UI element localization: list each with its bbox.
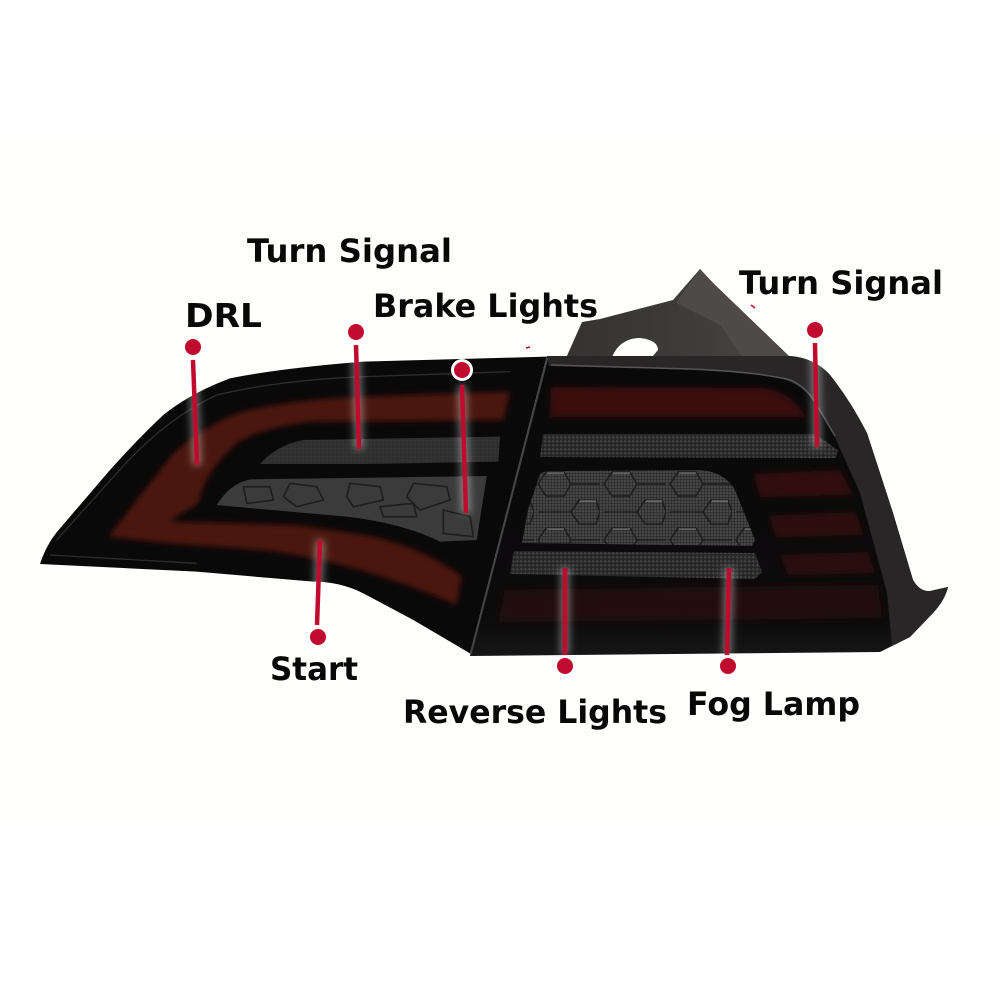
left lamp edge lines bbox=[50, 372, 510, 563]
dot: DRL bbox=[185, 339, 201, 355]
line: turn signal right bbox=[815, 343, 817, 447]
right lamp lens: lower strip bbox=[510, 551, 762, 579]
label: Start: Start bbox=[270, 650, 358, 688]
label: Brake Lights: Brake Lights bbox=[373, 287, 598, 325]
line: turn signal left bbox=[356, 345, 359, 449]
dot: start bbox=[310, 629, 326, 645]
dot: fog lamp bbox=[720, 658, 736, 674]
line: fog lamp bbox=[727, 568, 729, 655]
mounting bracket bbox=[566, 269, 792, 359]
left lamp body bbox=[40, 357, 547, 654]
line: reverse lights bbox=[563, 568, 567, 655]
label: Fog Lamp: Fog Lamp bbox=[687, 685, 860, 723]
callout lines bbox=[193, 343, 817, 655]
left lamp red band bbox=[108, 392, 510, 605]
line: brake lights bbox=[462, 385, 466, 513]
dot: reverse lights bbox=[557, 658, 573, 674]
label: Turn Signal right: Turn Signal bbox=[739, 264, 943, 302]
left lamp lens: honeycomb bbox=[217, 476, 487, 542]
line: DRL bbox=[193, 360, 197, 465]
label: Reverse Lights: Reverse Lights bbox=[403, 693, 667, 731]
dot: turn signal right bbox=[807, 322, 823, 338]
dot: turn signal left bbox=[348, 324, 364, 340]
label: Turn Signal left: Turn Signal bbox=[247, 232, 452, 270]
right lamp lens: honeycomb bbox=[522, 470, 755, 546]
label: DRL: DRL bbox=[185, 296, 262, 335]
right lamp rim bbox=[547, 356, 948, 646]
left lamp lens: upper strip bbox=[260, 437, 500, 464]
right lamp body bbox=[470, 356, 948, 656]
line: start bbox=[317, 540, 320, 625]
stray red specks bbox=[526, 305, 755, 348]
left lamp seam bbox=[471, 358, 547, 654]
right lamp highlight bbox=[551, 365, 835, 436]
right lamp lens: upper strip bbox=[540, 434, 838, 458]
right lamp red bands bbox=[498, 387, 882, 622]
callout dots bbox=[185, 322, 823, 674]
dot: brake lights bbox=[454, 362, 470, 378]
